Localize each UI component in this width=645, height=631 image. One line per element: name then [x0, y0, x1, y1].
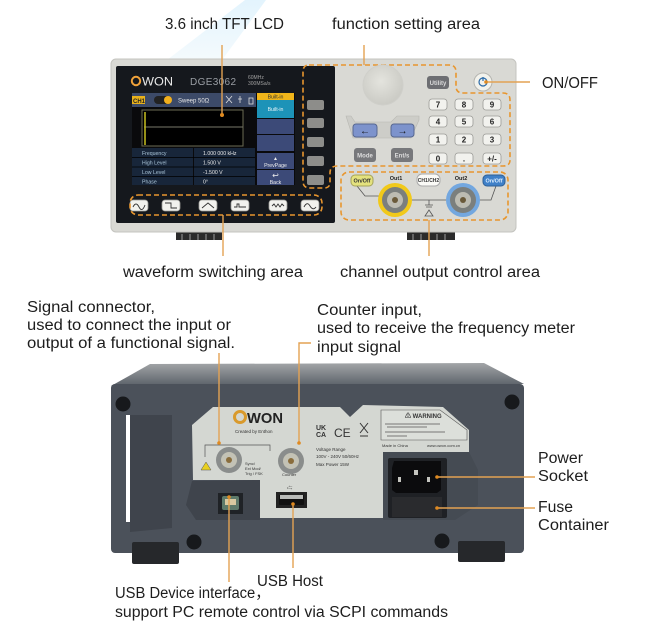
power button	[474, 73, 492, 91]
parameter table: Frequency	[142, 151, 167, 157]
rubber feet	[132, 541, 505, 564]
arrow buttons	[346, 116, 419, 138]
leader line: fuse container	[435, 506, 535, 510]
rear logo: Created by Enthon	[235, 429, 273, 434]
model spec: 60MHz	[248, 75, 264, 81]
front panel instrument	[111, 59, 516, 240]
plate small text: Made in China	[382, 443, 409, 448]
on toggle	[154, 96, 172, 104]
voltage specs: 100V - 240V 50/60Hz	[316, 454, 360, 459]
text: signal connector: output of a functional signal.	[27, 335, 235, 352]
mode button: Mode	[357, 154, 373, 160]
text: fuse container	[538, 499, 609, 534]
text: counter input: Counter input,	[317, 302, 422, 319]
numeric keypad: 7	[436, 100, 441, 110]
leader line: on/off	[484, 80, 530, 84]
feet	[176, 230, 455, 240]
channel output controls: Out1	[390, 176, 402, 182]
leader line: USB device	[227, 495, 231, 582]
USB device port	[218, 493, 243, 514]
numeric keypad: 4	[436, 118, 441, 126]
numeric keypad: 9	[490, 100, 495, 110]
numeric keypad: +/-	[487, 154, 497, 164]
compliance marks: UK	[316, 425, 326, 432]
waveform plot	[142, 110, 243, 146]
softkey column	[257, 93, 294, 186]
utility button: Utility	[430, 81, 447, 87]
signal BNC connector: Trig / FSK	[245, 471, 263, 476]
label: waveform switching area: waveform switching area	[122, 264, 303, 281]
leader line: channel area	[428, 220, 430, 256]
signal BNC connector: Sync/	[245, 461, 256, 466]
voltage specs: Voltage Range	[316, 447, 346, 452]
brand logo: WON	[142, 74, 173, 88]
USB host port	[276, 484, 307, 508]
waveform buttons	[130, 200, 319, 211]
text: USB device interface	[115, 585, 448, 621]
softkey column: Built-in	[268, 94, 284, 100]
side soft buttons	[307, 100, 324, 185]
parameter table: Phase	[142, 180, 157, 186]
label: ON/OFF: ON/OFF	[542, 75, 598, 92]
text: counter input: input signal	[317, 339, 401, 356]
utility button	[427, 76, 449, 89]
model spec	[248, 75, 271, 87]
rear body	[111, 384, 524, 553]
black control panel	[116, 66, 335, 223]
compliance marks: CA	[316, 432, 326, 439]
mounting holes	[116, 394, 520, 550]
ent button: Ent/s	[395, 154, 410, 160]
label plate	[192, 405, 469, 518]
label: channel output control area: channel output control area	[340, 264, 540, 281]
model spec: 300MSa/s	[248, 81, 271, 87]
compliance marks: CE	[334, 426, 351, 440]
counter BNC connector	[278, 448, 304, 477]
leader line: function area	[363, 45, 365, 65]
power recess	[383, 452, 478, 520]
numeric keypad: 6	[490, 118, 495, 126]
voltage specs	[316, 447, 360, 467]
text: fuse container: Fuse	[538, 499, 573, 516]
label: 3.6 inch TFT LCD: 3.6 inch TFT LCD	[165, 16, 284, 33]
warning label: ⚠ WARNING	[405, 413, 442, 420]
channel output controls: On/Off	[353, 178, 371, 184]
numeric keypad: .	[463, 154, 465, 164]
BNC connector: output 2	[446, 183, 480, 217]
model name: DGE3062	[190, 77, 236, 88]
numeric keypad: 5	[462, 118, 467, 126]
text: counter input	[317, 302, 575, 356]
label: function setting area: function setting area	[332, 16, 480, 33]
BNC connector: output 1	[378, 183, 412, 217]
text: power socket: Socket	[538, 468, 589, 485]
dashed outline: channel output control area	[341, 172, 508, 220]
text: counter input: used to receive the frequency meter	[317, 320, 575, 337]
rotary knob	[363, 65, 403, 105]
numeric keypad: 3	[490, 136, 495, 144]
leader line: counter input	[297, 343, 311, 445]
text: signal connector: used to connect the input or	[27, 317, 231, 334]
power socket	[388, 458, 447, 518]
sweep text: Sweep 50Ω	[178, 98, 210, 104]
rear panel instrument	[111, 363, 524, 564]
channel tag	[132, 96, 146, 105]
status icons	[226, 96, 253, 104]
softkey column: Back	[270, 180, 282, 186]
parameter table: 1.000 000 kHz	[203, 151, 237, 157]
recessed port area	[186, 480, 260, 520]
warning label	[381, 410, 467, 440]
text: USB host: USB Host	[257, 573, 324, 590]
signal BNC connector	[201, 445, 270, 476]
parameter table: Low Level	[142, 170, 165, 176]
parameter table	[132, 148, 255, 186]
parameter table: 1.500 V	[203, 160, 221, 166]
channel tag: CH1	[133, 99, 146, 105]
channel output controls: Out2	[455, 176, 467, 182]
numeric keypad	[429, 99, 501, 164]
softkey column: Built-in	[268, 107, 284, 113]
softkey column: PrevPage	[264, 163, 287, 169]
channel output controls: On/Off	[485, 178, 503, 184]
arrow buttons: ←	[360, 126, 370, 137]
plate small text	[382, 443, 460, 448]
leader line: USB host	[291, 502, 295, 568]
softkey column: ▲	[273, 156, 278, 162]
numeric keypad: 8	[462, 100, 467, 110]
parameter table: 0°	[203, 180, 208, 186]
text: signal connector: Signal connector,	[27, 299, 155, 316]
text: USB device interface: USB Device interface，	[115, 585, 270, 602]
numeric keypad: 0	[436, 154, 441, 164]
LCD screen	[132, 93, 295, 186]
parameter table: -1.500 V	[203, 170, 223, 176]
instrument body	[111, 59, 516, 232]
parameter table: High Level	[142, 160, 167, 166]
left handle slot	[126, 415, 172, 532]
text: fuse container: Container	[538, 517, 609, 534]
leader line: signal connector	[217, 353, 221, 445]
text: power socket	[538, 450, 589, 485]
leader line: LCD	[220, 45, 224, 117]
text: signal connector	[27, 299, 235, 352]
USB host port: •⇋	[287, 484, 292, 490]
numeric keypad: 2	[462, 136, 467, 144]
compliance marks	[316, 423, 368, 440]
arrow buttons: →	[398, 126, 408, 137]
voltage specs: Max Power 15W	[316, 462, 350, 467]
text: power socket: Power	[538, 450, 583, 467]
dashed outline: waveform switching area	[130, 195, 322, 215]
ground symbol	[425, 200, 433, 216]
fuse container	[392, 497, 442, 517]
dashed outline: function setting area	[303, 65, 510, 188]
plate small text: www.owon.com.cn	[427, 443, 460, 448]
text: USB device interface: support PC remote control via SCPI commands	[115, 604, 448, 621]
rear logo: WON	[247, 410, 283, 427]
numeric keypad: 1	[436, 136, 441, 144]
ent button	[391, 148, 413, 162]
top surface	[111, 363, 524, 386]
mode button	[354, 148, 376, 162]
counter BNC connector: Counter	[282, 472, 297, 477]
softkey column: ↩	[272, 171, 279, 180]
channel output controls: CH1/CH2	[418, 178, 439, 184]
channel output controls	[351, 174, 505, 217]
signal BNC connector: Ext Mod/	[245, 466, 262, 471]
leader line: waveform area	[222, 215, 224, 256]
rear logo	[234, 410, 283, 434]
leader line: power socket	[435, 475, 535, 479]
